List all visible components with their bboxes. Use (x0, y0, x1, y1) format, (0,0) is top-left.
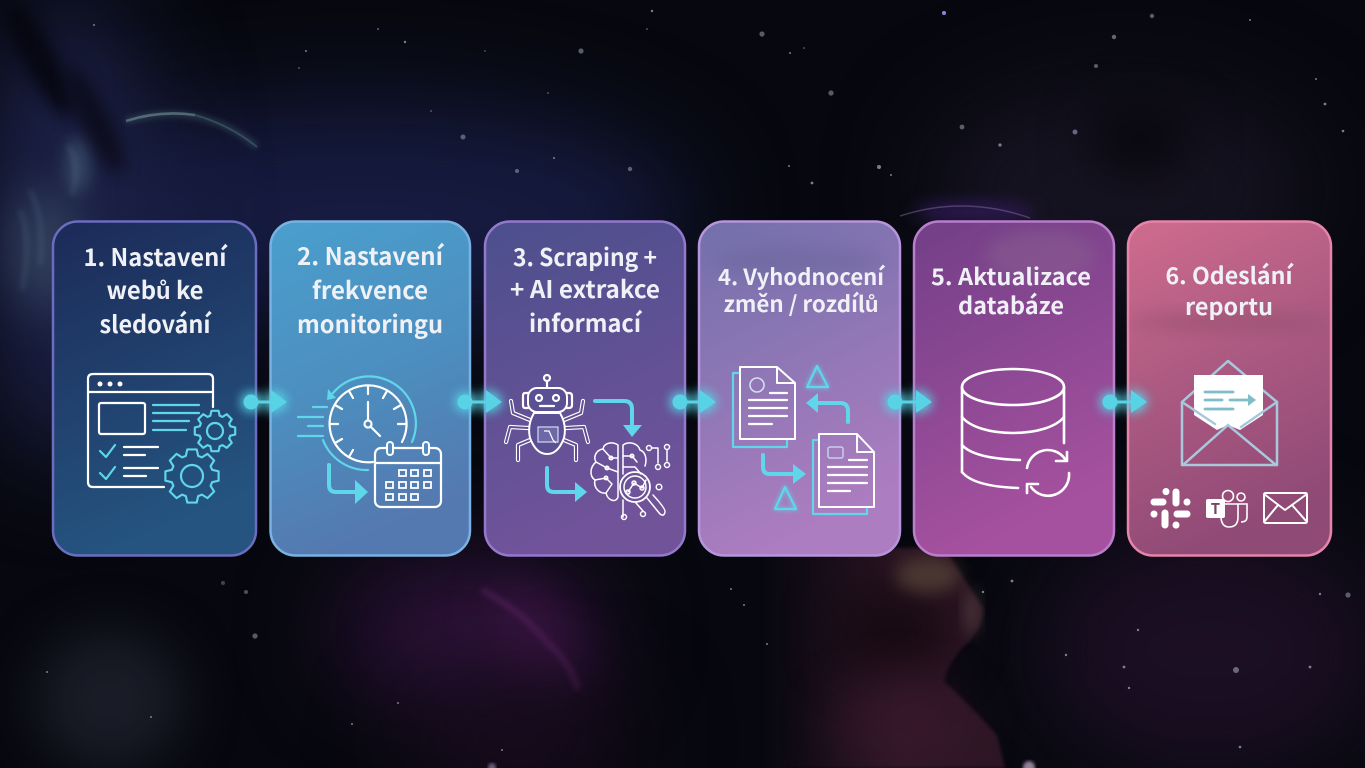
icon: Microsoft Teams: T (1211, 498, 1220, 519)
heading 3: informací (529, 304, 643, 339)
card background 5 (914, 222, 1114, 556)
arrow: step 5 to 6 (1102, 390, 1147, 413)
arrow: step 4 to 5 (888, 390, 932, 413)
heading 2 (297, 237, 445, 340)
heading 2: frekvence (312, 271, 428, 306)
card background 6 (1128, 222, 1331, 556)
heading 5: 5. Aktualizace (931, 258, 1091, 292)
panel: step 1 (53, 222, 256, 556)
heading 4: 4. Vyhodnocení (718, 260, 885, 292)
icon: compared documents (733, 367, 874, 514)
icon: AI brain with magnifier (591, 443, 670, 520)
arrow: step 3 to 4 (672, 390, 716, 413)
card background 2 (270, 222, 470, 556)
icon: database with sync (962, 369, 1069, 496)
icon: open envelope with report (1182, 361, 1277, 465)
icon: robot spider (506, 375, 588, 460)
heading 6: reportu (1185, 288, 1273, 322)
card background 4 (699, 222, 900, 556)
heading 5 (931, 258, 1091, 321)
panel: step 4 (699, 222, 900, 556)
heading 1 (84, 238, 228, 340)
icon: delta triangles (775, 366, 828, 509)
arrows: document exchange (763, 393, 848, 484)
heading 3 (510, 238, 660, 339)
icon: clock and calendar (298, 376, 441, 507)
heading 3: 3. Scraping + (513, 238, 657, 273)
heading 6 (1166, 257, 1295, 322)
card background 1 (53, 222, 256, 556)
heading 2: 2. Nastavení (297, 237, 445, 272)
heading 3: + AI extrakce (510, 270, 660, 305)
icon: browser window with gears (88, 374, 235, 503)
icon: Microsoft Teams (1206, 490, 1247, 527)
card nebula sheen 5 (990, 232, 1090, 278)
arrows: robot to brain (547, 401, 642, 502)
heading 2: monitoringu (297, 305, 443, 340)
icon: Slack (1154, 492, 1187, 525)
heading 5: databáze (958, 287, 1064, 321)
heading 1: webů ke (106, 271, 204, 306)
card background 3 (485, 222, 685, 556)
arrow: step 2 to 3 (458, 390, 502, 413)
arrow: step 1 to 2 (244, 390, 287, 413)
icon: mail (1264, 493, 1307, 523)
heading 4 (718, 260, 885, 319)
heading 1: 1. Nastavení (84, 238, 228, 273)
heading 6: 6. Odeslání (1166, 257, 1295, 291)
card nebula sheen 6 (1129, 313, 1329, 331)
panel: step 5 (914, 222, 1114, 556)
heading 1: sledování (100, 305, 212, 340)
heading 4: změn / rozdílů (724, 287, 878, 319)
card nebula sheen 4 (731, 250, 876, 276)
panel: step 3 (485, 222, 685, 556)
panel: step 6 (1128, 222, 1331, 556)
panel: step 2 (270, 222, 470, 556)
